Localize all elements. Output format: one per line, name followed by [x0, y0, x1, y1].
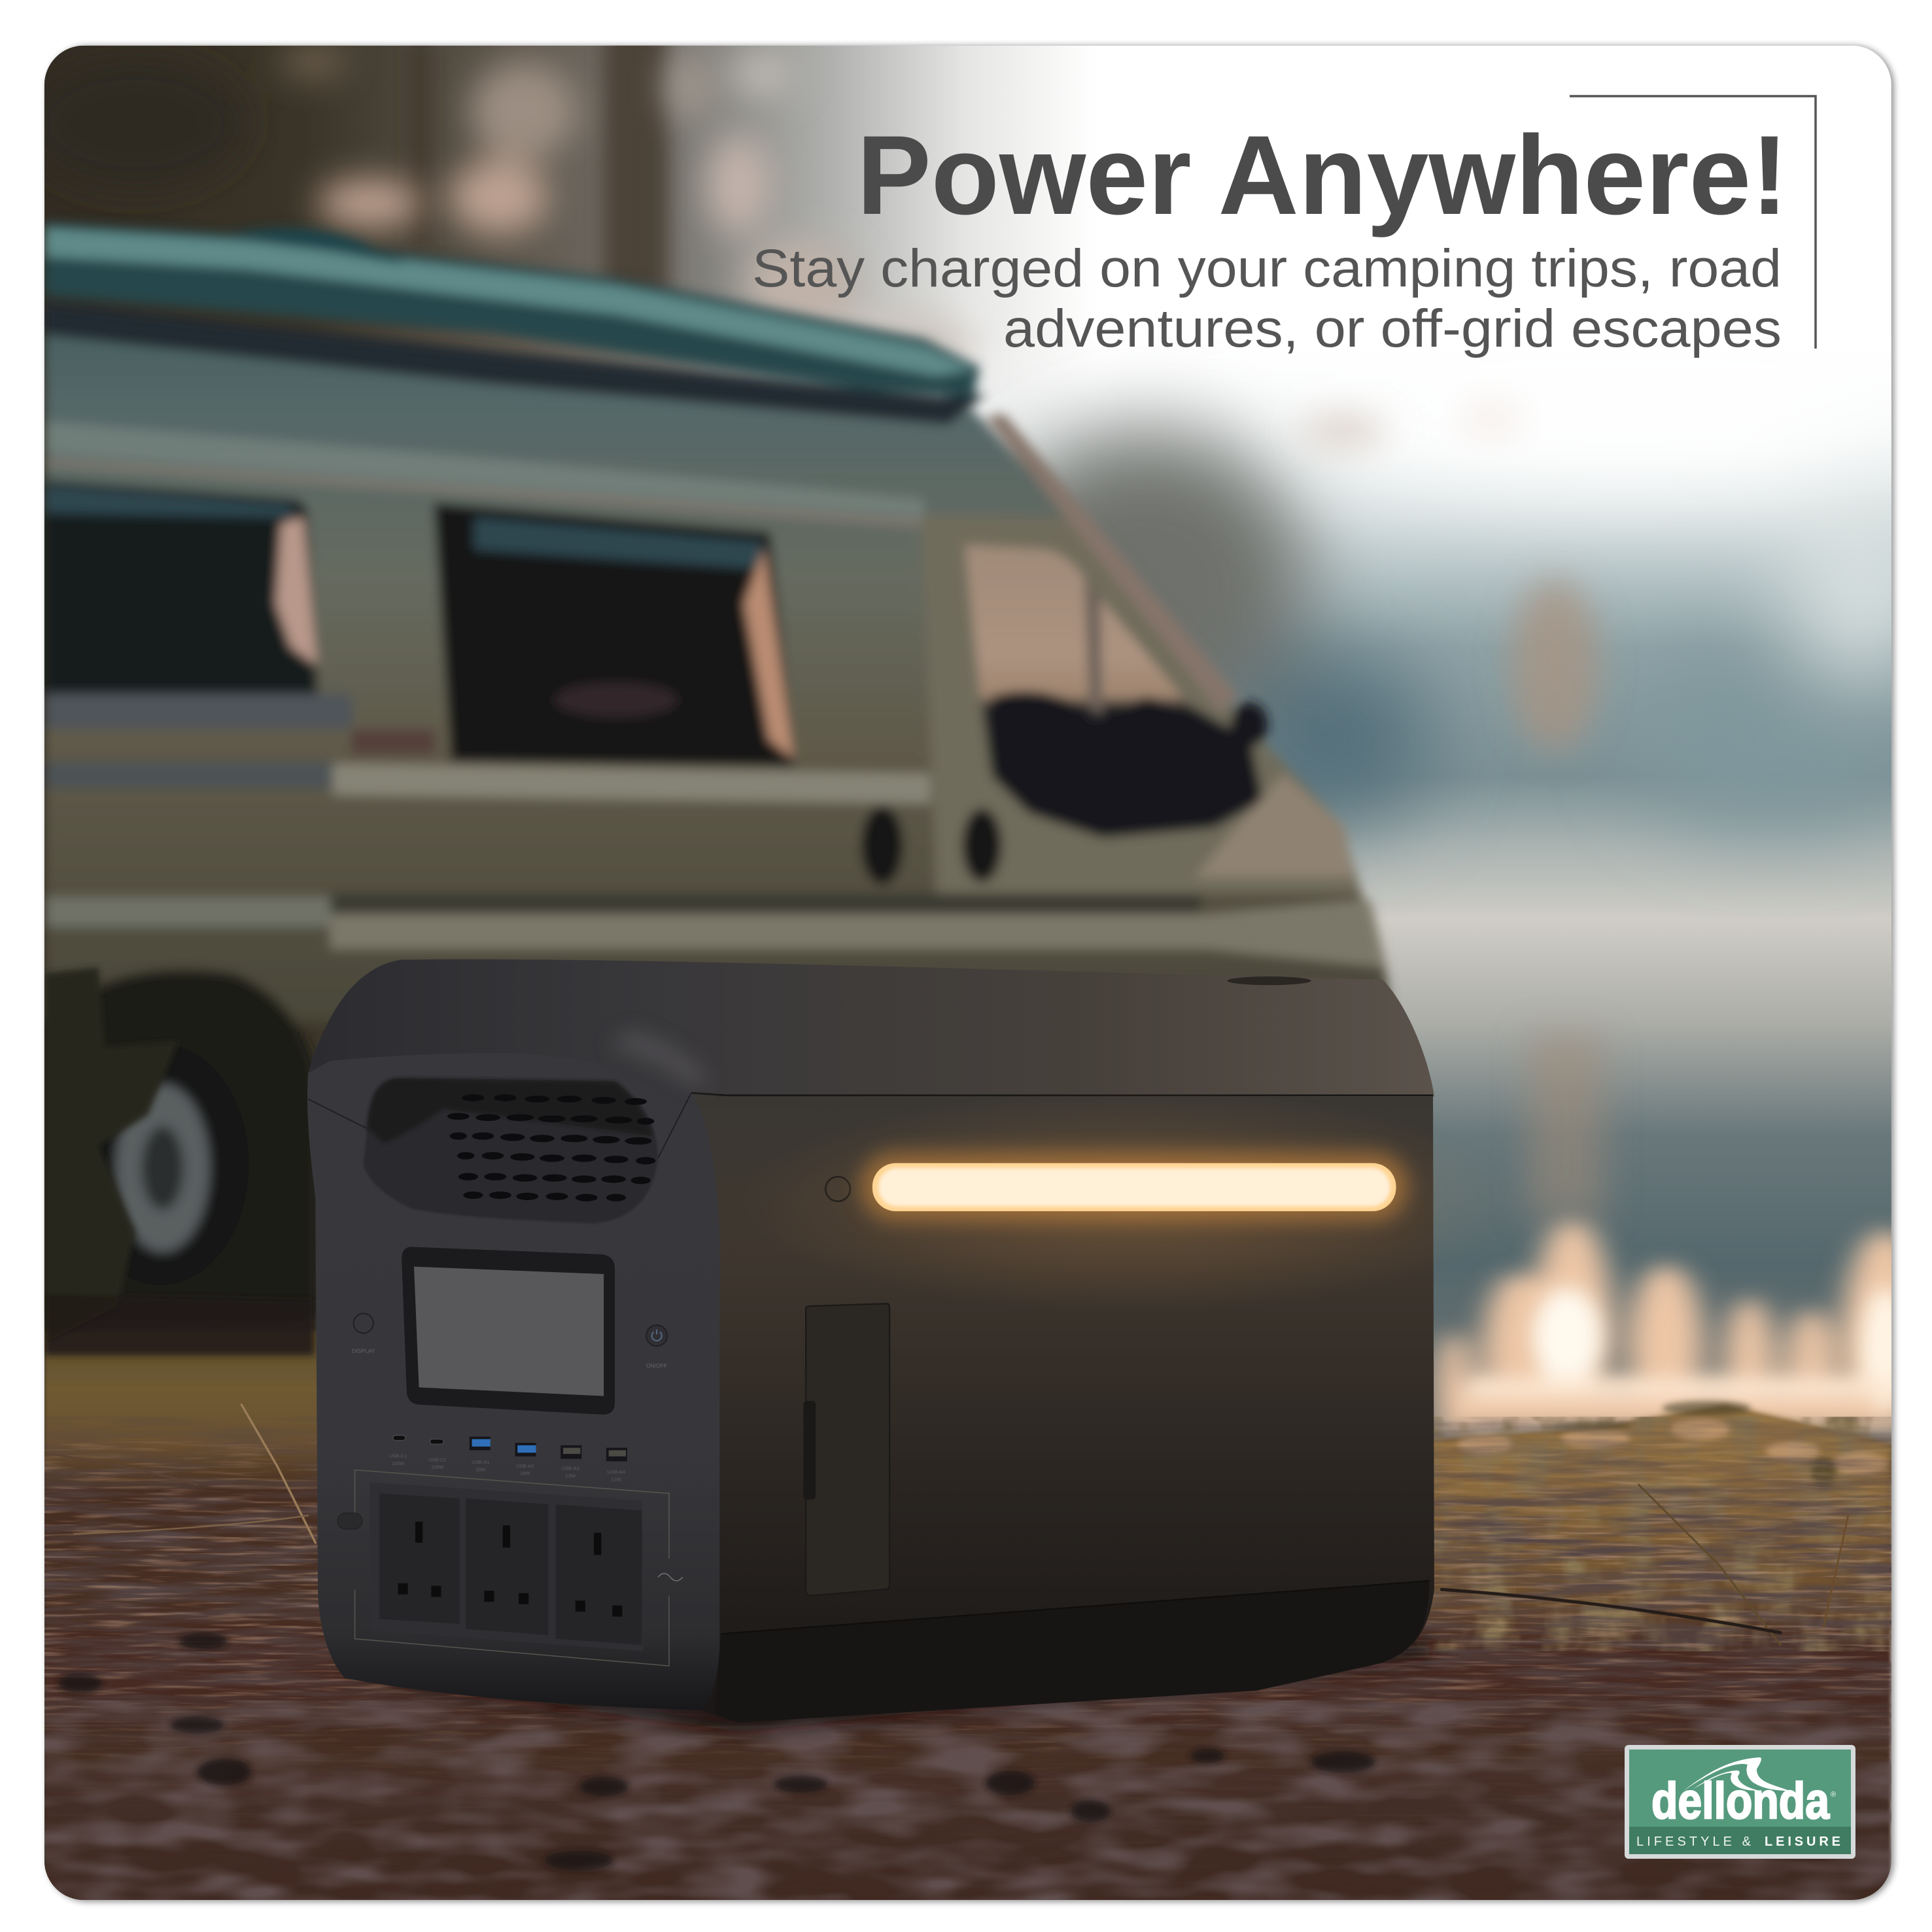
- small sensor circle: [825, 1177, 850, 1201]
- power button: [646, 1325, 667, 1369]
- heading: Power Anywhere!: [857, 112, 1788, 238]
- logo: dellonda lifestyle and leisure: LEISURE: [1765, 1835, 1844, 1849]
- subheading: [752, 239, 1782, 358]
- usb ports row: USB-C1: [389, 1453, 407, 1459]
- van lower side strip: [44, 694, 353, 728]
- heading frame line: [1570, 96, 1816, 349]
- front face: [307, 1053, 719, 1710]
- usb ports row: USB-A2: [516, 1463, 534, 1469]
- ac switch: [337, 1513, 362, 1529]
- logo: dellonda lifestyle and leisure: [1625, 1745, 1855, 1859]
- uk socket 2: [466, 1498, 548, 1635]
- display button: [354, 1313, 373, 1333]
- hatch latch: [803, 1401, 816, 1500]
- icon: wave: [1683, 1757, 1789, 1791]
- logo: dellonda lifestyle and leisure: dellonda: [1651, 1772, 1830, 1829]
- rear window: [44, 481, 318, 696]
- door handles: [861, 806, 903, 885]
- roadside shrub: [44, 967, 314, 1355]
- camper van: [44, 222, 1392, 1355]
- warm interior glow: [555, 683, 678, 717]
- uk socket 3: [556, 1504, 642, 1645]
- rear window top glare: [44, 485, 296, 517]
- logo: dellonda lifestyle and leisure: ®: [1831, 1791, 1836, 1799]
- subheading: adventures, or off-grid escapes: [1003, 299, 1782, 358]
- usb ports row: 18W: [520, 1470, 530, 1476]
- uk socket 1: [379, 1493, 460, 1624]
- logo: dellonda lifestyle and leisure: LIFESTYLE &: [1636, 1835, 1754, 1849]
- lid: [308, 959, 1434, 1097]
- sine wave badge: [658, 1574, 683, 1581]
- lake reflections: [1437, 1220, 1927, 1440]
- usb ports row: [389, 1436, 627, 1482]
- led light bar core: [878, 1168, 1390, 1206]
- usb ports row: USB-A1: [472, 1459, 489, 1465]
- cab door frame: [922, 515, 1362, 893]
- rooftop rack shadow: [44, 302, 986, 425]
- side hatch: [806, 1303, 889, 1596]
- usb ports row: 100W: [431, 1464, 445, 1470]
- wheel arch and tyre: [44, 969, 318, 1319]
- scattered twigs: [49, 1405, 1848, 1645]
- power button: ON/OFF: [646, 1362, 667, 1369]
- contact shadow: [339, 1639, 1429, 1731]
- middle window reflection: [744, 548, 793, 759]
- right side mist fading to distant trees and lake: [1014, 348, 1891, 1478]
- corner highlight: [610, 1030, 712, 1084]
- left lower strip: [44, 761, 334, 789]
- usb ports row: 18W: [475, 1466, 486, 1472]
- usb ports row: USB-A3: [562, 1466, 579, 1472]
- red marker: [351, 729, 435, 754]
- middle window glare: [474, 517, 767, 569]
- subheading: Stay charged on your camping trips, road: [752, 239, 1782, 298]
- power station: DISPLAY: [352, 1348, 375, 1354]
- cab pillar: [1084, 579, 1103, 715]
- usb ports row: USB-C2: [428, 1457, 447, 1462]
- ac outlet panel outline: [355, 1470, 669, 1666]
- lower side band: [715, 1581, 1429, 1723]
- handle band seams: [308, 1093, 691, 1158]
- roof highlight: [44, 228, 973, 376]
- a-pillar highlight: [986, 414, 1238, 712]
- handle shadow: [367, 1078, 653, 1143]
- vent grid: [447, 1094, 655, 1201]
- van lower trim: [44, 897, 330, 927]
- hood highlight: [1195, 774, 1353, 877]
- power station: [307, 959, 1528, 1731]
- top handle recess: [1227, 976, 1311, 985]
- van body: [44, 333, 1392, 1023]
- side body: [665, 1090, 1434, 1723]
- side wall light wash: [739, 1090, 1528, 1312]
- rear window reflection: [276, 517, 317, 665]
- ground: pine needles and dirt: [44, 1331, 1897, 1910]
- ac outlet recess: [370, 1482, 643, 1651]
- middle window frame: [434, 503, 795, 767]
- usb ports row: 100W: [392, 1460, 405, 1466]
- cab reflection trees: [992, 691, 1257, 838]
- van roof pod: [44, 222, 980, 397]
- van waist strip: [333, 764, 930, 803]
- usb ports row: USB-A4: [607, 1469, 625, 1475]
- led light bar: [872, 1163, 1396, 1211]
- cab window: [965, 545, 1263, 838]
- usb ports row: 12W: [566, 1473, 576, 1479]
- led light bar glow: [860, 1152, 1408, 1221]
- van upper trim: [44, 421, 924, 517]
- roof top fin: [228, 228, 407, 265]
- display bezel: [402, 1247, 615, 1415]
- carry handle grip recess: [364, 1078, 658, 1224]
- display screen: [414, 1267, 604, 1396]
- side bottom seam: [721, 1581, 1429, 1634]
- lid seam: [691, 1093, 1433, 1095]
- usb ports row: 12W: [611, 1476, 622, 1482]
- side mirror: [1231, 702, 1268, 747]
